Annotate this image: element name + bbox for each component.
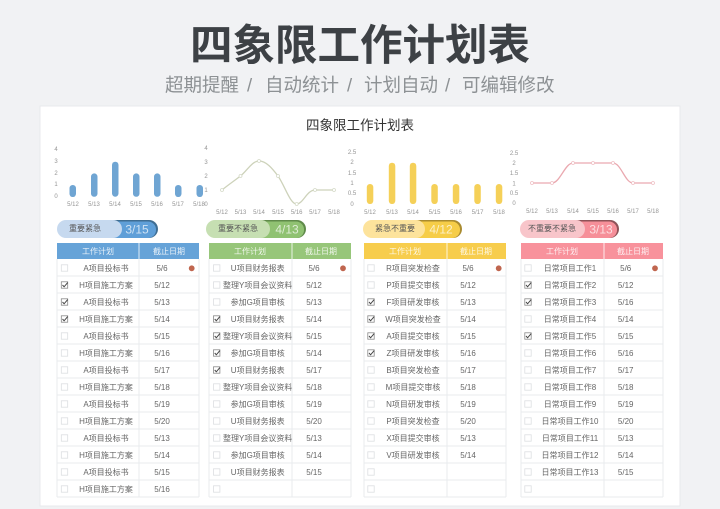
row: 5/16 bbox=[154, 349, 170, 358]
chart: not important not urgent line bbox=[510, 151, 659, 215]
chart: urgent not important bars: 2.5 bbox=[348, 150, 357, 156]
row: 5/14 bbox=[306, 315, 322, 324]
row bbox=[61, 365, 170, 375]
row: Z项目研发审核 bbox=[387, 348, 439, 358]
row: P项目突发检查 bbox=[386, 416, 440, 426]
row: 参加G项目审核 bbox=[231, 348, 285, 358]
row: H项目施工方案 bbox=[79, 416, 133, 426]
chart: important not urgent line: 1 bbox=[204, 188, 208, 194]
chart: not important not urgent line: 1 bbox=[512, 182, 516, 188]
row: F项目研发审核 bbox=[387, 297, 439, 307]
row: H项目施工方案 bbox=[79, 382, 133, 392]
table header: 截止日期 bbox=[305, 246, 337, 256]
row: 日常项目工作5 bbox=[544, 331, 597, 341]
row: A项目投标书 bbox=[83, 399, 129, 409]
row bbox=[214, 314, 322, 324]
row: 5/15 bbox=[618, 468, 634, 477]
chart: urgent not important bars: 1.5 bbox=[348, 171, 357, 177]
row bbox=[368, 280, 476, 290]
pill: urgent not important 4/12: 4/12 bbox=[429, 222, 453, 236]
row: 5/20 bbox=[306, 417, 322, 426]
row: 日常项目工作12 bbox=[542, 450, 599, 460]
row: 5/13 bbox=[306, 298, 322, 307]
row: A项目投标书 bbox=[83, 467, 129, 477]
row bbox=[368, 365, 476, 375]
chart: important and urgent bars bbox=[54, 147, 205, 208]
row: 日常项目工作13 bbox=[542, 467, 599, 477]
table header bbox=[209, 243, 351, 259]
row bbox=[525, 486, 531, 492]
chart: urgent not important bars: 5/18 bbox=[493, 210, 505, 216]
chart: important and urgent bars: 5/13 bbox=[88, 202, 100, 208]
subtitle: / bbox=[347, 74, 353, 96]
subtitle: 自动统计 bbox=[265, 74, 339, 96]
row bbox=[61, 263, 168, 273]
row bbox=[368, 297, 476, 307]
row: 5/15 bbox=[618, 332, 634, 341]
chart: urgent not important bars: 0.5 bbox=[348, 191, 357, 197]
row: 5/18 bbox=[618, 383, 634, 392]
chart: not important not urgent line: 5/14 bbox=[567, 209, 579, 215]
chart: important not urgent line bbox=[204, 146, 340, 216]
row: 5/13 bbox=[618, 434, 634, 443]
row: H项目施工方案 bbox=[79, 484, 133, 494]
row bbox=[525, 331, 634, 341]
row bbox=[525, 348, 634, 358]
pill: urgent not important 4/12: 紧急不重要 bbox=[375, 223, 415, 233]
row: 日常项目工作1 bbox=[544, 263, 597, 273]
row: A项目投标书 bbox=[83, 263, 129, 273]
chart: not important not urgent line: 1.5 bbox=[510, 171, 519, 177]
row: 5/12 bbox=[618, 281, 634, 290]
row: 5/14 bbox=[618, 451, 634, 460]
chart: urgent not important bars: 1 bbox=[350, 181, 354, 187]
row bbox=[214, 263, 320, 273]
table: not important not urgent bbox=[521, 243, 663, 497]
chart: important not urgent line: 5/14 bbox=[253, 210, 265, 216]
table header bbox=[521, 243, 663, 259]
row: 5/12 bbox=[306, 281, 322, 290]
row: 参加G项目审核 bbox=[231, 450, 285, 460]
row: U项目财务报表 bbox=[231, 263, 285, 273]
row bbox=[61, 484, 170, 494]
row: 整理Y项目会议资料 bbox=[223, 331, 292, 341]
chart: urgent not important bars: 5/15 bbox=[429, 210, 441, 216]
chart: not important not urgent line: 5/13 bbox=[546, 209, 558, 215]
row: 5/14 bbox=[460, 451, 476, 460]
row: 5/6 bbox=[620, 264, 632, 273]
chart: important not urgent line: 5/15 bbox=[272, 210, 284, 216]
row bbox=[214, 486, 220, 492]
row bbox=[61, 297, 170, 307]
chart: not important not urgent line: 0 bbox=[512, 201, 516, 207]
row: 5/20 bbox=[618, 417, 634, 426]
chart: important not urgent line: 3 bbox=[204, 160, 208, 166]
row: 参加G项目审核 bbox=[231, 297, 285, 307]
row: 5/15 bbox=[306, 332, 322, 341]
chart: not important not urgent line: 5/17 bbox=[627, 209, 639, 215]
row bbox=[61, 467, 170, 477]
row: 5/13 bbox=[460, 298, 476, 307]
chart: urgent not important bars: 5/12 bbox=[364, 210, 376, 216]
row: 5/14 bbox=[306, 349, 322, 358]
chart: not important not urgent line: 5/18 bbox=[647, 209, 659, 215]
row: N项目研发审核 bbox=[386, 399, 440, 409]
chart: important not urgent line: 5/12 bbox=[216, 210, 228, 216]
row bbox=[368, 399, 476, 409]
row: 5/16 bbox=[618, 298, 634, 307]
row: A项目投标书 bbox=[83, 365, 129, 375]
row bbox=[368, 382, 476, 392]
chart: important and urgent bars: 5/15 bbox=[130, 202, 142, 208]
row bbox=[61, 399, 170, 409]
row: 5/14 bbox=[154, 315, 170, 324]
row: U项目财务报表 bbox=[231, 365, 285, 375]
subtitle: / bbox=[445, 74, 451, 96]
row: 5/17 bbox=[154, 366, 170, 375]
overdue marker bbox=[652, 265, 658, 271]
row bbox=[214, 297, 322, 307]
chart: important and urgent bars: 1 bbox=[54, 182, 58, 188]
row: W项目突发检查 bbox=[385, 314, 441, 324]
row bbox=[368, 263, 474, 273]
row: 日常项目工作6 bbox=[544, 348, 597, 358]
chart: important and urgent bars: 5/14 bbox=[109, 202, 121, 208]
row bbox=[368, 348, 476, 358]
sheet title: 四象限工作计划表 bbox=[306, 118, 414, 133]
row: 5/18 bbox=[460, 383, 476, 392]
subtitle: 可编辑修改 bbox=[462, 74, 555, 96]
pill: not important not urgent 3/13: 不重要不紧急 bbox=[528, 223, 576, 233]
chart: important and urgent bars: 5/12 bbox=[67, 202, 79, 208]
chart: important not urgent line: 5/18 bbox=[328, 210, 340, 216]
row: X项目提交审核 bbox=[386, 433, 440, 443]
row: R项目突发检查 bbox=[386, 263, 440, 273]
table: important not urgent bbox=[209, 243, 351, 497]
row bbox=[525, 297, 634, 307]
chart: not important not urgent line: 5/15 bbox=[587, 209, 599, 215]
pill: important not urgent 4/13 bbox=[206, 220, 306, 238]
row: 5/19 bbox=[306, 400, 322, 409]
panel: worksheet card bbox=[40, 106, 680, 506]
chart: urgent not important bars: 5/13 bbox=[386, 210, 398, 216]
chart: not important not urgent line: 5/12 bbox=[526, 209, 538, 215]
row bbox=[61, 314, 170, 324]
chart: urgent not important bars: 5/16 bbox=[450, 210, 462, 216]
pill: important not urgent 4/13: 重要不紧急 bbox=[218, 223, 258, 233]
row: 5/16 bbox=[460, 349, 476, 358]
table header bbox=[57, 243, 199, 259]
row bbox=[214, 365, 322, 375]
row bbox=[525, 416, 634, 426]
chart: urgent not important bars: 2 bbox=[350, 160, 354, 166]
subtitle: / bbox=[247, 74, 253, 96]
chart: important and urgent bars: 2 bbox=[54, 171, 58, 177]
row bbox=[61, 348, 170, 358]
row: B项目突发检查 bbox=[386, 365, 440, 375]
overdue marker bbox=[496, 265, 502, 271]
row: 5/17 bbox=[460, 366, 476, 375]
chart: not important not urgent line: 0.5 bbox=[510, 191, 519, 197]
row bbox=[214, 348, 322, 358]
chart: important and urgent bars: 4 bbox=[54, 147, 58, 153]
row bbox=[61, 280, 170, 290]
row bbox=[525, 280, 634, 290]
row: 5/14 bbox=[618, 315, 634, 324]
chart: important and urgent bars: 5/18 bbox=[193, 202, 205, 208]
row bbox=[368, 469, 374, 475]
table header: 截止日期 bbox=[617, 246, 649, 256]
row: H项目施工方案 bbox=[79, 348, 133, 358]
row bbox=[368, 331, 476, 341]
row: 5/13 bbox=[154, 298, 170, 307]
row bbox=[214, 467, 322, 477]
row: H项目施工方案 bbox=[79, 280, 133, 290]
row bbox=[61, 450, 170, 460]
row: 日常项目工作9 bbox=[544, 399, 597, 409]
row bbox=[368, 433, 476, 443]
row: 日常项目工作2 bbox=[544, 280, 597, 290]
row bbox=[525, 467, 634, 477]
subtitle bbox=[165, 74, 555, 96]
row: 5/19 bbox=[154, 400, 170, 409]
row: 5/12 bbox=[460, 281, 476, 290]
row: A项目投标书 bbox=[83, 331, 129, 341]
pill: important and urgent 3/15 bbox=[57, 220, 158, 238]
table header: 工作计划 bbox=[546, 246, 578, 256]
table header bbox=[364, 243, 506, 259]
row: 参加G项目审核 bbox=[231, 399, 285, 409]
pill: important not urgent 4/13: 4/13 bbox=[275, 222, 299, 236]
row bbox=[214, 433, 322, 443]
row: 5/20 bbox=[460, 417, 476, 426]
row: 日常项目工作7 bbox=[544, 365, 597, 375]
row: 整理Y项目会议资料 bbox=[223, 433, 292, 443]
table header: 工作计划 bbox=[389, 246, 421, 256]
subtitle: 计划自动 bbox=[364, 74, 438, 96]
table: urgent not important bbox=[364, 243, 506, 497]
row bbox=[525, 433, 634, 443]
row: 5/19 bbox=[618, 400, 634, 409]
row: 日常项目工作10 bbox=[542, 416, 599, 426]
row: 5/6 bbox=[308, 264, 320, 273]
row: V项目研发审核 bbox=[386, 450, 440, 460]
chart: important and urgent bars: 3 bbox=[54, 159, 58, 165]
table header: 截止日期 bbox=[460, 246, 492, 256]
row bbox=[214, 399, 322, 409]
chart: urgent not important bars: 5/17 bbox=[472, 210, 484, 216]
row: A项目提交审核 bbox=[386, 331, 440, 341]
row: 5/16 bbox=[618, 349, 634, 358]
row: 5/17 bbox=[306, 366, 322, 375]
row: 5/15 bbox=[154, 468, 170, 477]
row bbox=[61, 382, 170, 392]
chart: important not urgent line: 0 bbox=[204, 202, 208, 208]
row bbox=[61, 433, 170, 443]
row bbox=[525, 365, 634, 375]
row: 5/13 bbox=[460, 434, 476, 443]
row: 5/17 bbox=[618, 366, 634, 375]
chart: urgent not important bars bbox=[348, 150, 505, 216]
row: M项目提交审核 bbox=[386, 382, 440, 392]
row: 5/13 bbox=[306, 434, 322, 443]
row: 5/19 bbox=[460, 400, 476, 409]
row bbox=[214, 416, 322, 426]
overdue marker bbox=[340, 265, 346, 271]
table header: 工作计划 bbox=[82, 246, 114, 256]
row bbox=[214, 382, 322, 392]
row bbox=[525, 399, 634, 409]
table header: 截止日期 bbox=[153, 246, 185, 256]
main title: 四象限工作计划表 bbox=[190, 23, 530, 70]
row: 5/18 bbox=[306, 383, 322, 392]
row: 5/15 bbox=[460, 332, 476, 341]
chart: important not urgent line: 5/13 bbox=[235, 210, 247, 216]
row: H项目施工方案 bbox=[79, 314, 133, 324]
row: 整理Y项目会议资料 bbox=[223, 382, 292, 392]
row: 日常项目工作8 bbox=[544, 382, 597, 392]
row bbox=[61, 331, 170, 341]
row: 5/20 bbox=[154, 417, 170, 426]
chart: important not urgent line: 2 bbox=[204, 174, 208, 180]
chart: not important not urgent line: 2.5 bbox=[510, 151, 519, 157]
row: 5/6 bbox=[462, 264, 474, 273]
chart: urgent not important bars: 0 bbox=[350, 202, 354, 208]
overdue marker bbox=[189, 265, 195, 271]
row: 5/12 bbox=[154, 281, 170, 290]
row: 5/15 bbox=[306, 468, 322, 477]
chart: important and urgent bars: 0 bbox=[54, 194, 58, 200]
row: 日常项目工作11 bbox=[542, 433, 599, 443]
row: 5/14 bbox=[306, 451, 322, 460]
pill: important and urgent 3/15: 3/15 bbox=[125, 222, 149, 236]
row bbox=[214, 280, 322, 290]
chart: important not urgent line: 5/16 bbox=[291, 210, 303, 216]
row: 5/14 bbox=[460, 315, 476, 324]
row bbox=[525, 263, 632, 273]
row bbox=[368, 416, 476, 426]
row bbox=[214, 450, 322, 460]
row: A项目投标书 bbox=[83, 297, 129, 307]
row bbox=[525, 450, 634, 460]
row: U项目财务报表 bbox=[231, 467, 285, 477]
row bbox=[525, 314, 634, 324]
chart: urgent not important bars: 5/14 bbox=[407, 210, 419, 216]
chart: important not urgent line: 5/17 bbox=[309, 210, 321, 216]
row: U项目财务报表 bbox=[231, 314, 285, 324]
row bbox=[368, 486, 374, 492]
row: 整理Y项目会议资料 bbox=[223, 280, 292, 290]
row: 5/6 bbox=[156, 264, 168, 273]
row: 5/18 bbox=[154, 383, 170, 392]
row: 5/14 bbox=[154, 451, 170, 460]
row bbox=[61, 416, 170, 426]
chart: not important not urgent line: 5/16 bbox=[607, 209, 619, 215]
row: 5/13 bbox=[154, 434, 170, 443]
row: 日常项目工作4 bbox=[544, 314, 597, 324]
row: P项目提交审核 bbox=[386, 280, 440, 290]
row: 日常项目工作3 bbox=[544, 297, 597, 307]
table header: 工作计划 bbox=[234, 246, 266, 256]
row bbox=[368, 450, 476, 460]
row bbox=[214, 331, 322, 341]
row bbox=[525, 382, 634, 392]
pill: not important not urgent 3/13: 3/13 bbox=[589, 222, 613, 236]
pill: urgent not important 4/12 bbox=[363, 220, 462, 238]
table: important and urgent bbox=[57, 243, 199, 497]
row: 5/15 bbox=[154, 332, 170, 341]
chart: important and urgent bars: 5/16 bbox=[151, 202, 163, 208]
pill: not important not urgent 3/13 bbox=[520, 220, 619, 238]
pill: important and urgent 3/15: 重要紧急 bbox=[69, 223, 101, 233]
subtitle: 超期提醒 bbox=[165, 74, 239, 96]
row: A项目投标书 bbox=[83, 433, 129, 443]
row: U项目财务报表 bbox=[231, 416, 285, 426]
chart: important and urgent bars: 5/17 bbox=[172, 202, 184, 208]
row: 5/16 bbox=[154, 485, 170, 494]
row bbox=[368, 314, 476, 324]
chart: important not urgent line: 4 bbox=[204, 146, 208, 152]
chart: not important not urgent line: 2 bbox=[512, 161, 516, 167]
row: H项目施工方案 bbox=[79, 450, 133, 460]
